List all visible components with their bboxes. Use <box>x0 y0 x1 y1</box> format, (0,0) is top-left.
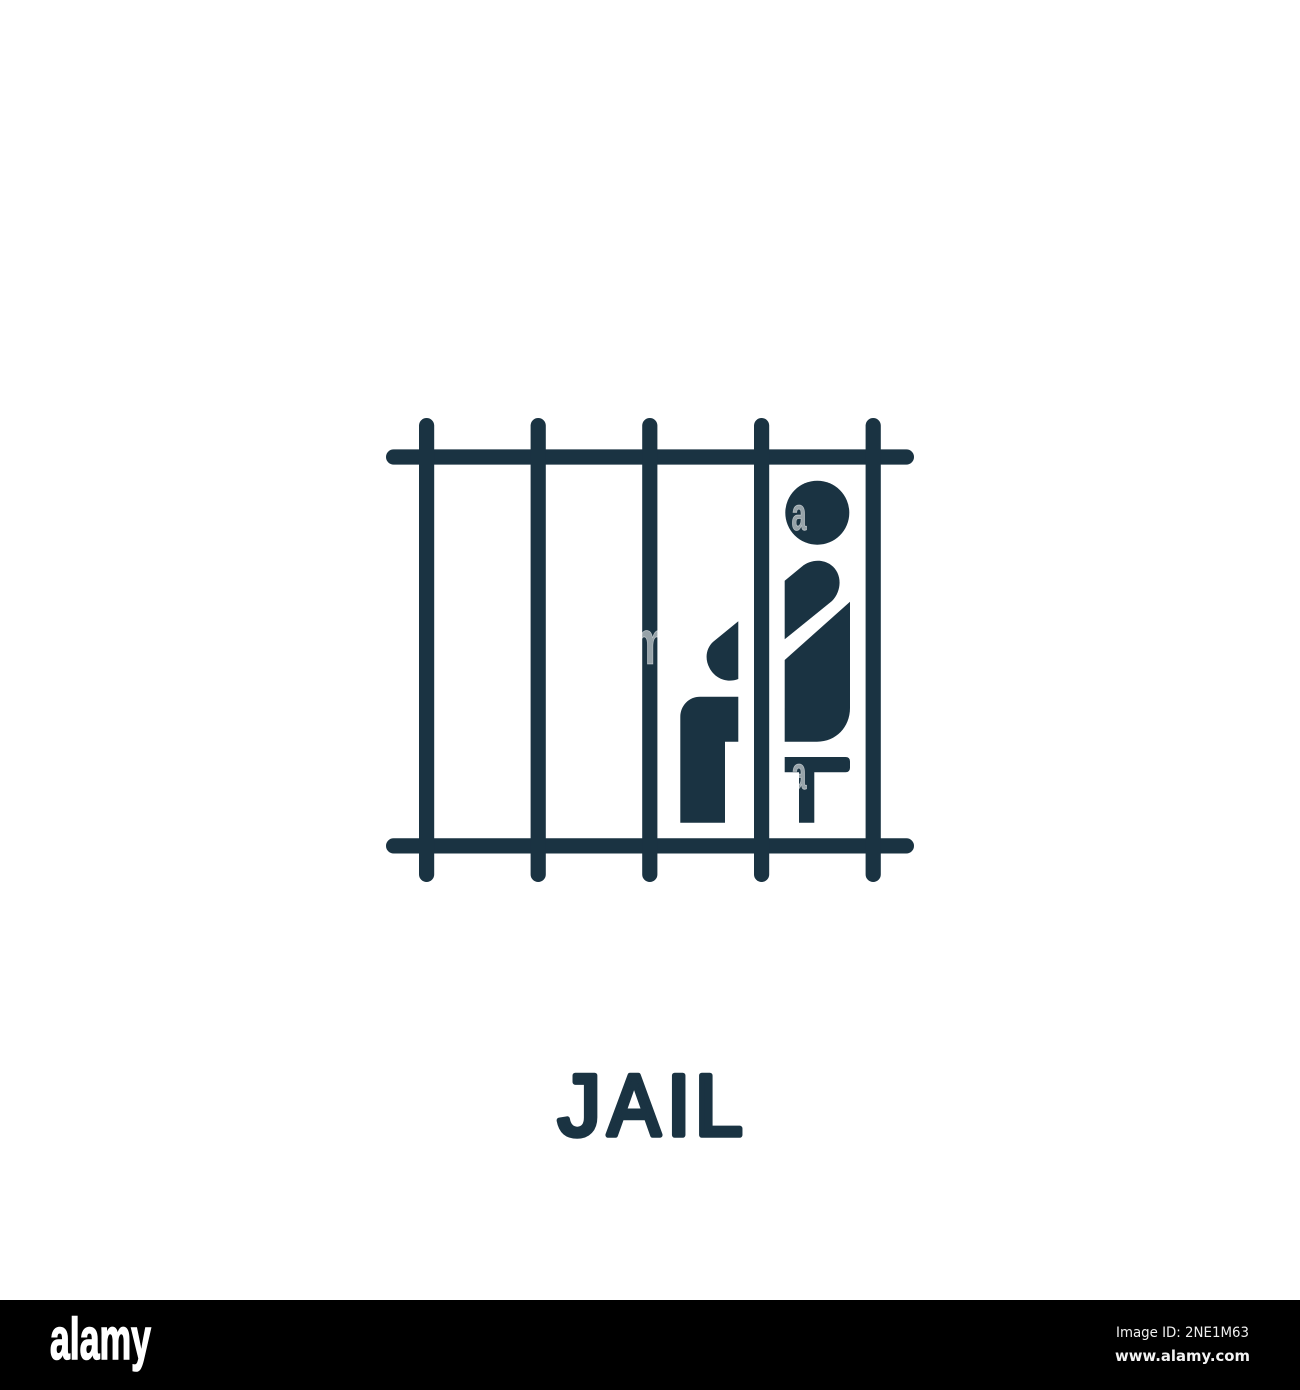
watermark letter on bar: m <box>632 609 668 678</box>
vertical bar 4 <box>754 418 769 882</box>
person head <box>785 481 849 545</box>
watermark fragments over icon <box>632 488 807 799</box>
title: JAIL: A <box>608 1058 661 1154</box>
bench seat and post <box>785 757 850 823</box>
icon: cell bars <box>386 418 914 882</box>
title: JAIL <box>558 1058 743 1154</box>
top horizontal bar <box>386 449 914 465</box>
alamy logo wordmark: alamy <box>50 1307 151 1372</box>
person upper torso <box>785 561 840 639</box>
icon: seated person <box>680 481 850 823</box>
vertical bar 3 <box>642 418 657 882</box>
person forearm <box>707 621 738 681</box>
vertical bar 1 <box>419 418 434 882</box>
icon: jail cell with seated prisoner <box>386 418 914 882</box>
image id: Image ID: 2NE1M63 <box>1116 1325 1249 1341</box>
title: JAIL: L <box>695 1058 743 1154</box>
bottom horizontal bar <box>386 838 914 854</box>
vertical bar 2 <box>531 418 546 882</box>
title: JAIL: J <box>558 1058 601 1154</box>
website url: www.alamy.com <box>1115 1347 1250 1365</box>
footer band <box>0 1300 1300 1390</box>
person lower torso <box>785 602 850 742</box>
watermark letter on seat: a <box>792 747 807 799</box>
vertical bar 5 <box>866 418 881 882</box>
person leg <box>680 697 738 823</box>
footer background <box>0 1300 1300 1390</box>
title: JAIL: I <box>667 1058 691 1154</box>
watermark letter on head: a <box>792 488 807 540</box>
